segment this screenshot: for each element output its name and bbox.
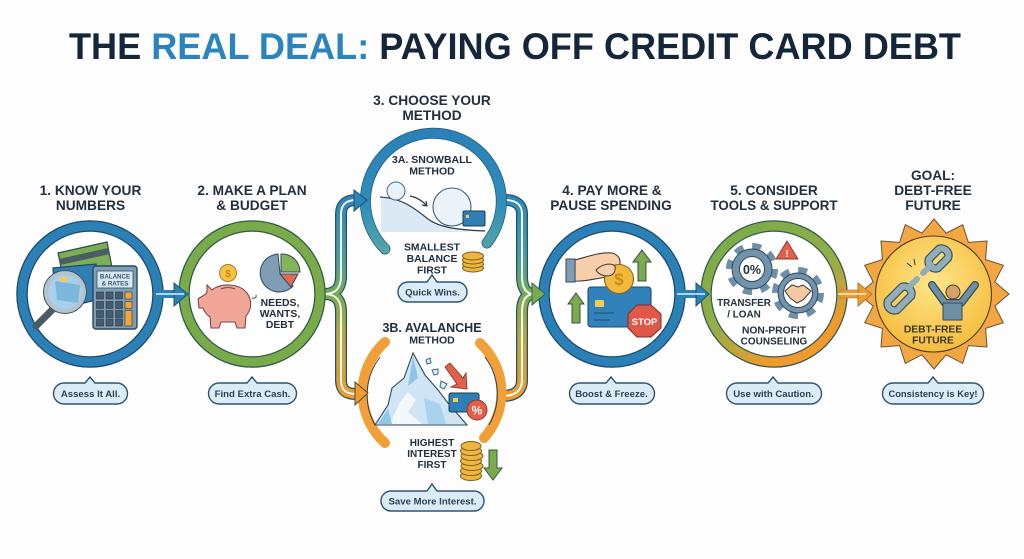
step 2 ring and icons: NEEDS, [261, 298, 299, 309]
step 3A snowball panel: METHOD [409, 166, 455, 178]
step 5 heading: TOOLS & SUPPORT [710, 198, 838, 213]
step 3A snowball panel: 3A. SNOWBALL [392, 154, 473, 166]
goal callout [883, 377, 984, 404]
goal heading: FUTURE [905, 198, 961, 213]
step 5 callout [726, 377, 822, 404]
step 4 heading: 4. PAY MORE & [562, 183, 662, 198]
goal heading: DEBT-FREE [894, 183, 972, 198]
arrow: step 1 to 2 [156, 283, 188, 306]
step 3B avalanche panel: 3B. AVALANCHE [382, 321, 482, 335]
goal heading: GOAL: [911, 168, 955, 183]
step 5 ring and icons [706, 226, 842, 362]
step 5 heading [710, 183, 838, 213]
step 3 heading [373, 93, 491, 123]
step 3B avalanche panel: INTEREST [407, 449, 457, 460]
step 4 heading: PAUSE SPENDING [550, 198, 672, 213]
step 3B avalanche panel [363, 321, 502, 480]
step 3A snowball panel [365, 133, 501, 276]
step 4 ring and icons: $ [614, 270, 624, 289]
goal heading [894, 168, 972, 213]
connectors between steps [324, 200, 534, 396]
step 3B callout: Save More Interest. [389, 496, 476, 508]
title: THE REAL DEAL: PAYING OFF CREDIT CARD DEBT [69, 26, 961, 67]
step 2 ring and icons [184, 226, 320, 362]
step 5 ring and icons: ! [785, 249, 789, 260]
step 3A callout: Quick Wins. [405, 288, 460, 298]
step 4 callout: Boost & Freeze. [575, 389, 648, 400]
step 5 callout: Use with Caution. [733, 389, 814, 400]
step 3A snowball panel: FIRST [417, 266, 448, 276]
arrow: step 4 to 5 [677, 283, 709, 306]
step 2 callout: Find Extra Cash. [215, 389, 290, 400]
step 2 ring and icons: DEBT [266, 320, 295, 331]
step 3B callout [381, 484, 484, 511]
step 3 heading: 3. CHOOSE YOUR [373, 93, 491, 108]
step 3B avalanche panel: HIGHEST [410, 438, 454, 449]
step 3B avalanche panel: FIRST [418, 460, 446, 471]
step 1 ring and icons: & RATES [102, 280, 128, 288]
arrow: into step 4 [532, 283, 545, 305]
step 5 ring and icons: 0% [743, 263, 761, 277]
step 3A snowball panel: BALANCE [407, 254, 457, 265]
step 2 ring and icons: $ [225, 269, 231, 280]
step 2 callout [208, 377, 296, 404]
step 1 ring and icons [22, 226, 158, 362]
step 5 ring and icons: / LOAN [727, 310, 761, 320]
goal sunburst and icons: DEBT-FREE [904, 324, 962, 336]
goal sunburst and icons: FUTURE [912, 336, 954, 346]
step 4 ring and icons [544, 226, 680, 362]
arrow: into 3A [354, 190, 367, 211]
step 4 ring and icons: STOP [632, 317, 658, 328]
step 4 heading [550, 183, 672, 213]
goal callout: Consistency is Key! [888, 388, 978, 399]
arrow: into 3B [355, 382, 368, 405]
arrow: step 5 to goal [838, 283, 872, 306]
step 2 heading: & BUDGET [216, 198, 288, 213]
step 2 heading: 2. MAKE A PLAN [197, 183, 307, 198]
step 1 callout [54, 377, 128, 404]
step 3 heading: METHOD [402, 108, 462, 123]
step 1 heading: NUMBERS [56, 198, 125, 213]
step 2 ring and icons: WANTS, [260, 309, 300, 320]
step 5 heading: 5. CONSIDER [730, 183, 818, 198]
step 3A callout [398, 275, 467, 302]
step 3B avalanche panel: METHOD [409, 334, 455, 346]
step 2 heading [197, 183, 307, 213]
step 5 ring and icons: COUNSELING [741, 336, 808, 348]
step 5 ring and icons: TRANSFER [717, 298, 771, 309]
step 1 heading [40, 183, 141, 213]
step 1 heading: 1. KNOW YOUR [40, 183, 141, 198]
step 1 callout: Assess It All. [61, 389, 120, 400]
step 5 ring and icons: NON-PROFIT [742, 326, 807, 336]
goal sunburst and icons [859, 219, 1009, 369]
step 4 callout [570, 377, 654, 404]
step 3B avalanche panel: % [472, 404, 483, 418]
step 1 ring and icons: BALANCE [100, 274, 130, 280]
step 3A snowball panel: SMALLEST [404, 242, 461, 254]
